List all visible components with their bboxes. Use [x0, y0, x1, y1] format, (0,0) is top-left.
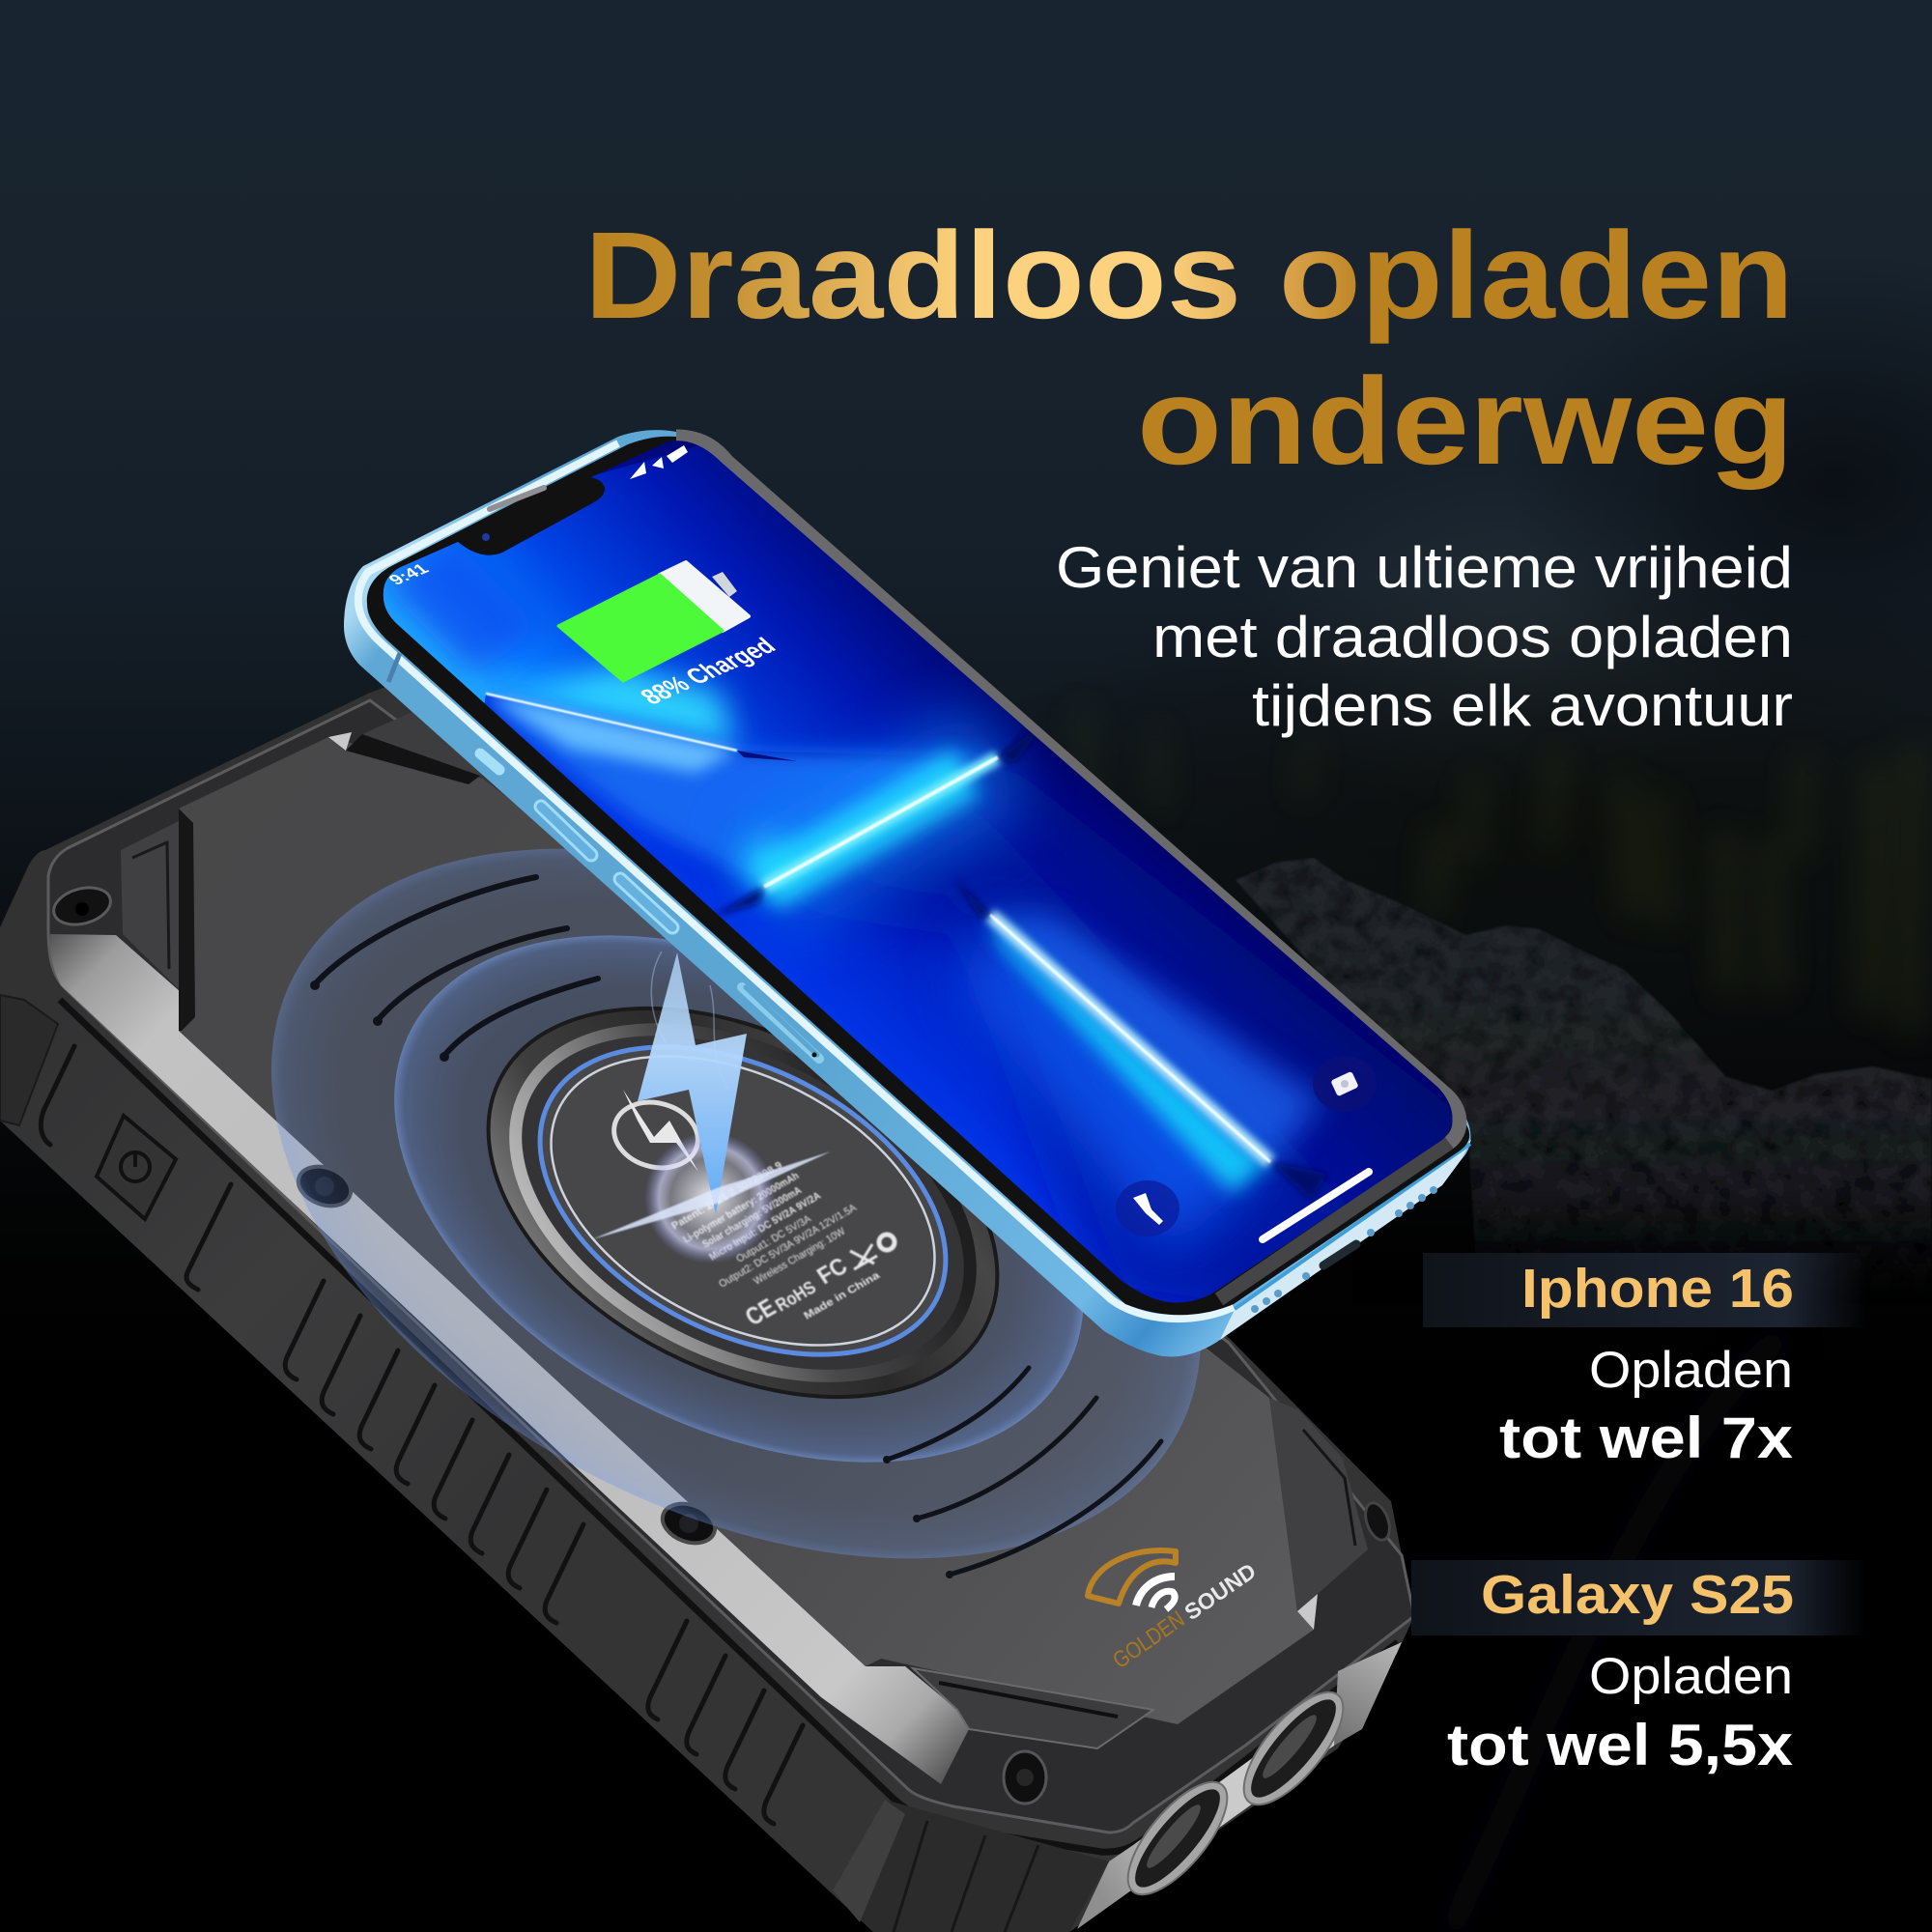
- label print: Micro Input: DC 5V/2A 9V/2A: [707, 1190, 823, 1263]
- label print: Output1: DC 5V/3A: [734, 1213, 814, 1264]
- brand logo: Golden Sound: [1088, 1550, 1261, 1674]
- subtitle text block: Geniet van ultieme vrijheid: [1056, 535, 1793, 600]
- label print: Wireless Charging: 10W: [752, 1226, 848, 1287]
- label print: [669, 1160, 895, 1331]
- label print: Li-polymer battery: 20000mAh: [681, 1170, 802, 1245]
- wireless charging ring: outer: [154, 704, 1319, 1703]
- screw block and top-left corner bevel: [121, 809, 195, 1031]
- inner dark ring: [458, 958, 1028, 1447]
- subtitle text block: tijdens elk avontuur: [1252, 673, 1793, 738]
- subtitle text block: met draadloos opladen: [1152, 605, 1793, 669]
- phone white edge highlight: [358, 443, 1234, 1319]
- phone upper-right metal edge: [676, 437, 1460, 1143]
- smartphone: [344, 425, 1478, 1356]
- home indicator: [1263, 1172, 1369, 1239]
- charging lightning bolt: [592, 952, 831, 1264]
- heading: [584, 207, 1794, 491]
- label print: CE: [741, 1294, 781, 1331]
- phone lower bezel: [1219, 1143, 1449, 1299]
- label inner white ring: [503, 997, 982, 1405]
- power bank body: rubber side: [0, 676, 1414, 1932]
- side buttons: [480, 753, 819, 1059]
- flashlight button: [1116, 1180, 1179, 1236]
- end face with output ports: [1077, 1642, 1402, 1929]
- main dark plate: [179, 737, 1314, 1724]
- label print: RoHS: [772, 1278, 820, 1316]
- clock: 9:41: [384, 560, 433, 588]
- charging logo on label: [607, 1090, 705, 1177]
- camera button: [1313, 1056, 1377, 1112]
- battery icon: [558, 562, 749, 681]
- spec block: Galaxy S25: [1411, 1560, 1866, 1777]
- subtitle text block: [1056, 535, 1793, 738]
- spec block: Galaxy S25: tot wel 5,5x: [1447, 1713, 1793, 1777]
- battery percentage: 88% Charged: [634, 633, 781, 709]
- brand logo: Golden Sound: GOLDEN: [1108, 1606, 1189, 1674]
- metal ring around label: [424, 929, 1062, 1476]
- antenna line: [388, 653, 400, 682]
- top notch wedge: [328, 712, 502, 784]
- spec block: Galaxy S25: Opladen: [1589, 1648, 1793, 1705]
- rubber bumper at bottom: [833, 1800, 1109, 1932]
- phone bottom light panel with speaker and port: [1220, 1140, 1471, 1340]
- dark line under frame: [60, 1000, 1398, 1852]
- wireless charging ring: middle: [306, 828, 1172, 1570]
- power button: [97, 1116, 176, 1219]
- power bank inner frame: [48, 700, 1414, 1833]
- screws: [49, 882, 1394, 1804]
- rubber corner block: [0, 995, 58, 1125]
- label print: Made in China: [802, 1269, 883, 1321]
- spec block: iPhone 16: Opladen: [1589, 1342, 1793, 1399]
- spec block: iPhone 16: tot wel 7x: [1499, 1406, 1793, 1470]
- rubber ridges: [41, 1046, 803, 1824]
- phone bezel: [367, 437, 1469, 1315]
- phone screen: [383, 440, 1453, 1302]
- label disc: [489, 984, 997, 1417]
- label print: Patent: 2021 2 3022398.9: [669, 1160, 784, 1232]
- spec block: Galaxy S25: Galaxy S25: [1481, 1564, 1794, 1626]
- right-side groove panel: [1269, 1398, 1368, 1630]
- spec block: iPhone 16: [1423, 1253, 1866, 1470]
- spec block: iPhone 16: Iphone 16: [1521, 1258, 1794, 1320]
- status icons: [630, 445, 688, 479]
- heading: onderweg: [1137, 353, 1794, 491]
- label print: FC: [812, 1253, 852, 1290]
- phone body side: [344, 430, 1470, 1356]
- power bank: [0, 676, 1414, 1932]
- label print: Output2: DC 5V/3A 9V/2A 12V/1.5A: [717, 1202, 859, 1290]
- slot line: [939, 1683, 1118, 1717]
- groove arcs: [310, 877, 1161, 1578]
- brand logo: Golden Sound: SOUND: [1179, 1558, 1261, 1625]
- speaker slit and camera: [482, 488, 544, 541]
- silver strip: [50, 934, 969, 1784]
- heading: Draadloos opladen: [584, 207, 1794, 345]
- label print: Solar charging: 5V/200mA: [700, 1184, 804, 1250]
- slot panel near corner: [913, 1668, 1153, 1748]
